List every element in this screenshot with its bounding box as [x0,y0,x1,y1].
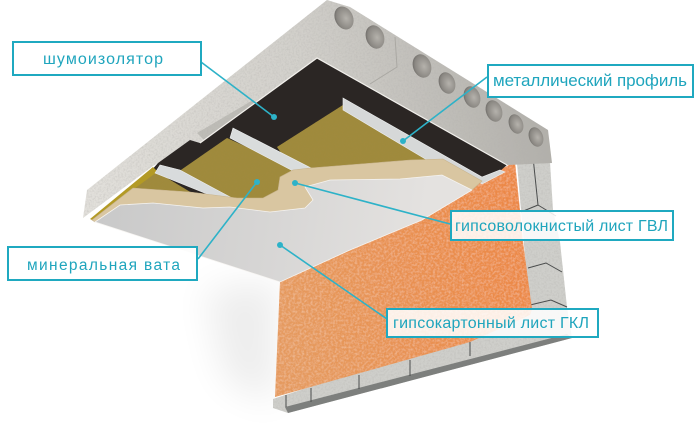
leader line: минеральная вата [198,179,260,259]
leader line: шумоизолятор [201,62,277,120]
label: металлический профиль: металлический профиль [493,71,687,90]
label: металлический профиль [488,65,693,97]
gypsum fibre board GVL [92,159,482,222]
orange plastered wall [275,162,532,397]
mineral wool batts [90,105,432,221]
label: минеральная вата [8,247,197,280]
label: гипсоволокнистый лист ГВЛ: гипсоволокнистый лист ГВЛ [455,218,668,235]
leader line: гипсоволокнистый лист [292,180,450,224]
metal profiles [155,98,505,199]
slab hollow core openings [331,3,546,149]
soft shadow behind wall [205,280,278,405]
label: гипсоволокнистый лист ГВЛ [451,211,673,240]
brick wall base shadow band [285,334,572,413]
slab surface shading [197,100,258,140]
leader line: металлический профиль [400,77,487,144]
black sound insulation layer [130,58,507,200]
brick joints [286,157,567,407]
leader line: гипсокартонный лист [277,242,387,319]
label: гипсокартонный лист ГКЛ: гипсокартонный лист ГКЛ [393,315,589,332]
gypsum plasterboard GKL [95,175,472,282]
brick wall [273,157,572,413]
label: шумоизолятор: шумоизолятор [43,51,163,68]
yellow edge strip [90,167,158,221]
label: минеральная вата: минеральная вата [27,257,180,274]
label: шумоизолятор [13,42,201,75]
concrete floor slab [83,0,552,218]
label: гипсокартонный лист ГКЛ [387,309,598,337]
